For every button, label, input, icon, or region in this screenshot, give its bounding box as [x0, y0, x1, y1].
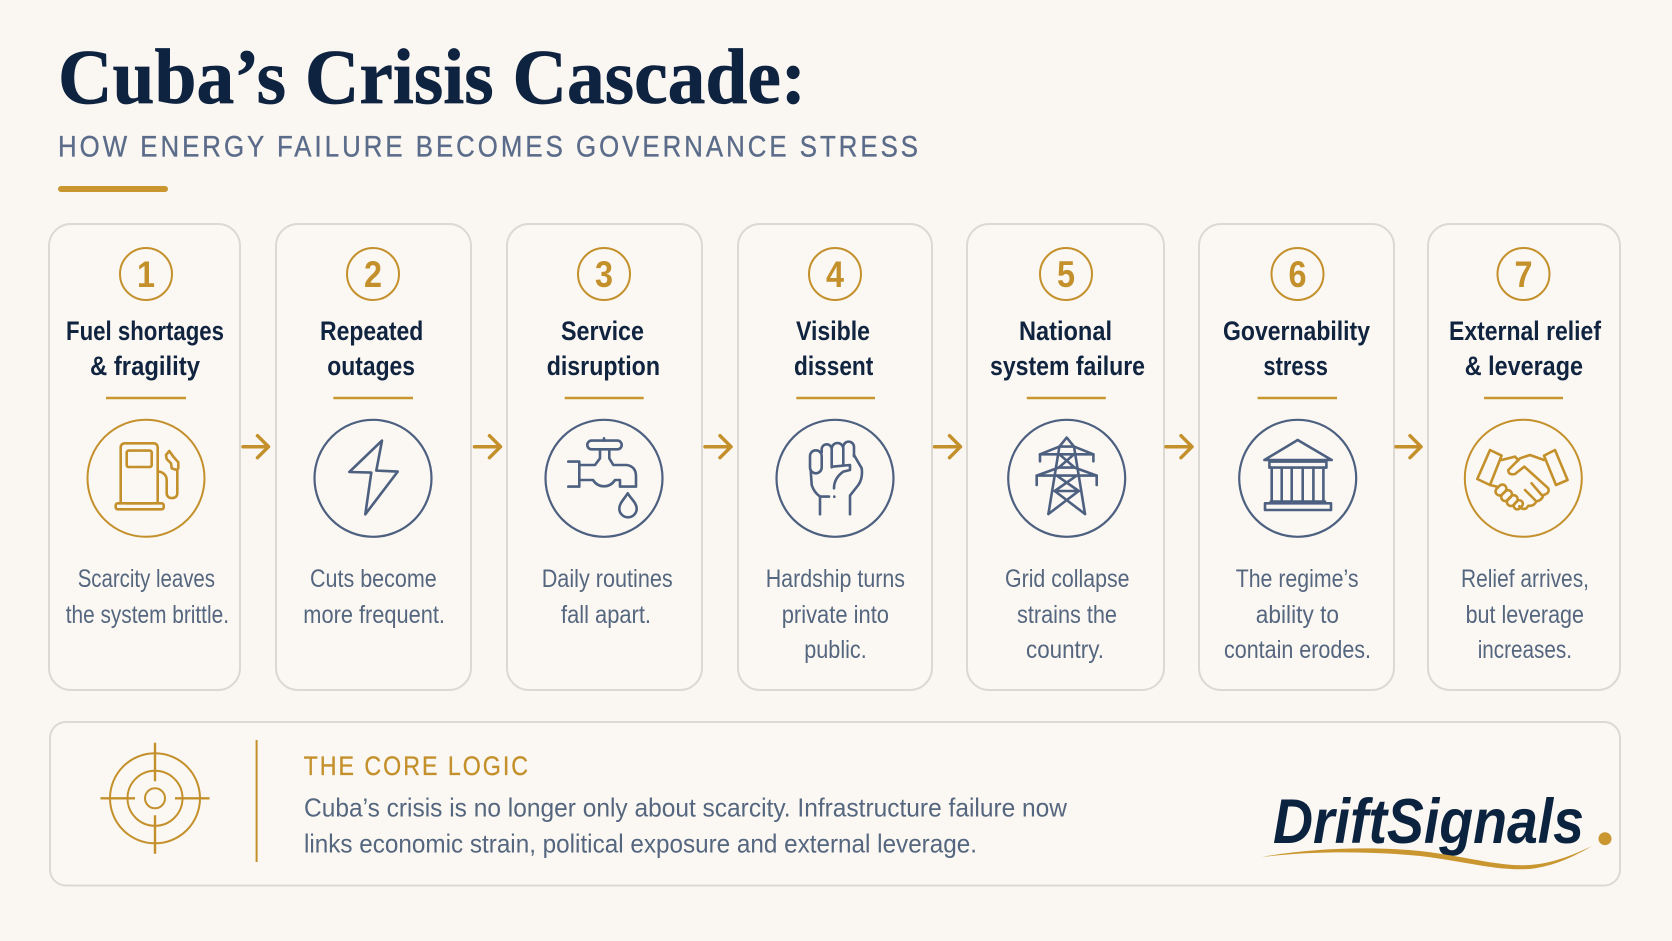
title accent bar: [58, 186, 168, 192]
description: step 5: Grid collapse: [1005, 565, 1130, 593]
heading: step 1: & fragility: [90, 351, 200, 381]
description: step 7: but leverage: [1466, 601, 1584, 629]
icon: government building: [1239, 420, 1356, 537]
core logic heading: THE CORE LOGIC: [304, 751, 528, 781]
description: step 6: The regime’s: [1236, 565, 1358, 593]
step number 7: [1498, 248, 1550, 300]
icon: dripping tap: [546, 420, 662, 537]
arrow 6 to 7: [1396, 436, 1421, 458]
description: step 2: more frequent.: [303, 601, 445, 629]
step number 2: [347, 248, 399, 300]
description: step 4: [766, 565, 905, 664]
heading: step 3: [547, 316, 660, 381]
description: step 4: private into: [782, 601, 889, 629]
divider: [256, 740, 258, 862]
heading: step 4: [794, 316, 873, 381]
title: Cuba’s Crisis Cascade:: [58, 33, 806, 120]
step number 1: [120, 248, 172, 300]
description: step 5: [1005, 565, 1130, 664]
icon: fuel pump: [88, 420, 204, 537]
description: step 7: [1461, 565, 1589, 664]
panel: step 1 fuel shortages: [49, 224, 240, 690]
step number 3: [578, 248, 630, 300]
description: step 6: [1224, 565, 1371, 664]
arrow 4 to 5: [934, 436, 960, 458]
arrow 5 to 6: [1166, 436, 1192, 458]
step number 6: 6: [1288, 254, 1306, 295]
description: step 6: contain erodes.: [1224, 636, 1371, 664]
heading: step 4: Visible: [796, 316, 870, 346]
step number 5: [1040, 248, 1092, 300]
description: step 1: the system brittle.: [66, 601, 229, 629]
description: step 1: [66, 565, 229, 629]
description: step 7: Relief arrives,: [1461, 565, 1589, 593]
logo: DriftSignals: DriftSignals: [1273, 787, 1584, 857]
core logic text: Cuba’s crisis is no longer only about scarcity. Infrastructure failure now: [304, 793, 1067, 823]
description: step 3: fall apart.: [561, 601, 651, 629]
subtitle: HOW ENERGY FAILURE BECOMES GOVERNANCE STRESS: [58, 130, 918, 163]
heading: step 3: Service: [561, 316, 644, 346]
panel: step 6 governability stress: [1199, 224, 1394, 690]
panel: step 7 external relief: [1428, 224, 1620, 690]
heading: step 6: Governability: [1223, 316, 1370, 346]
panel: step 3 service disruption: [507, 224, 702, 690]
panel: core logic: [50, 722, 1620, 886]
heading: step 7: [1449, 316, 1602, 381]
heading: step 7: & leverage: [1465, 351, 1583, 381]
description: step 3: Daily routines: [542, 565, 673, 593]
step number 2: 2: [364, 254, 382, 295]
description: step 5: country.: [1026, 636, 1104, 664]
step number 1: 1: [137, 254, 155, 295]
description: step 2: Cuts become: [310, 565, 437, 593]
heading: step 5: National: [1019, 316, 1112, 346]
heading: step 2: [320, 316, 423, 381]
panel: step 4 visible dissent: [738, 224, 932, 690]
description: step 4: public.: [804, 636, 867, 664]
heading: step 3: disruption: [547, 351, 660, 381]
heading: step 4: dissent: [794, 351, 873, 381]
icon: handshake: [1465, 420, 1582, 537]
arrow 1 to 2: [243, 436, 268, 458]
description: step 2: [303, 565, 445, 629]
core logic text: [304, 793, 1067, 859]
step number 5: 5: [1057, 254, 1075, 295]
step number 7: 7: [1514, 254, 1532, 295]
heading: step 1: [66, 316, 224, 381]
arrow 3 to 4: [705, 436, 731, 458]
step number 6: [1272, 248, 1324, 300]
icon: target: [100, 743, 210, 854]
step number 3: 3: [595, 254, 613, 295]
panel: step 2 repeated outages: [276, 224, 471, 690]
arrow 2 to 3: [474, 436, 500, 458]
icon: transmission tower: [1008, 420, 1125, 537]
description: step 6: ability to: [1256, 601, 1339, 629]
heading: step 5: system failure: [990, 351, 1145, 381]
heading: step 6: stress: [1263, 351, 1328, 381]
step number 4: 4: [826, 254, 844, 295]
heading: step 1: Fuel shortages: [66, 316, 224, 346]
description: step 7: increases.: [1478, 636, 1572, 664]
icon: lightning bolt: [314, 420, 432, 537]
heading: step 6: [1223, 316, 1370, 381]
description: step 5: strains the: [1017, 601, 1117, 629]
heading: step 5: [990, 316, 1145, 381]
heading: step 7: External relief: [1449, 316, 1602, 346]
panel: step 5 national system failure: [967, 224, 1164, 690]
heading: step 2: outages: [327, 351, 415, 381]
core logic text: links economic strain, political exposure and external leverage.: [304, 829, 977, 859]
description: step 1: Scarcity leaves: [78, 565, 215, 593]
step number 4: [809, 248, 861, 300]
description: step 4: Hardship turns: [766, 565, 905, 593]
description: step 3: [542, 565, 673, 629]
heading: step 2: Repeated: [320, 316, 423, 346]
icon: raised fist: [776, 420, 894, 537]
